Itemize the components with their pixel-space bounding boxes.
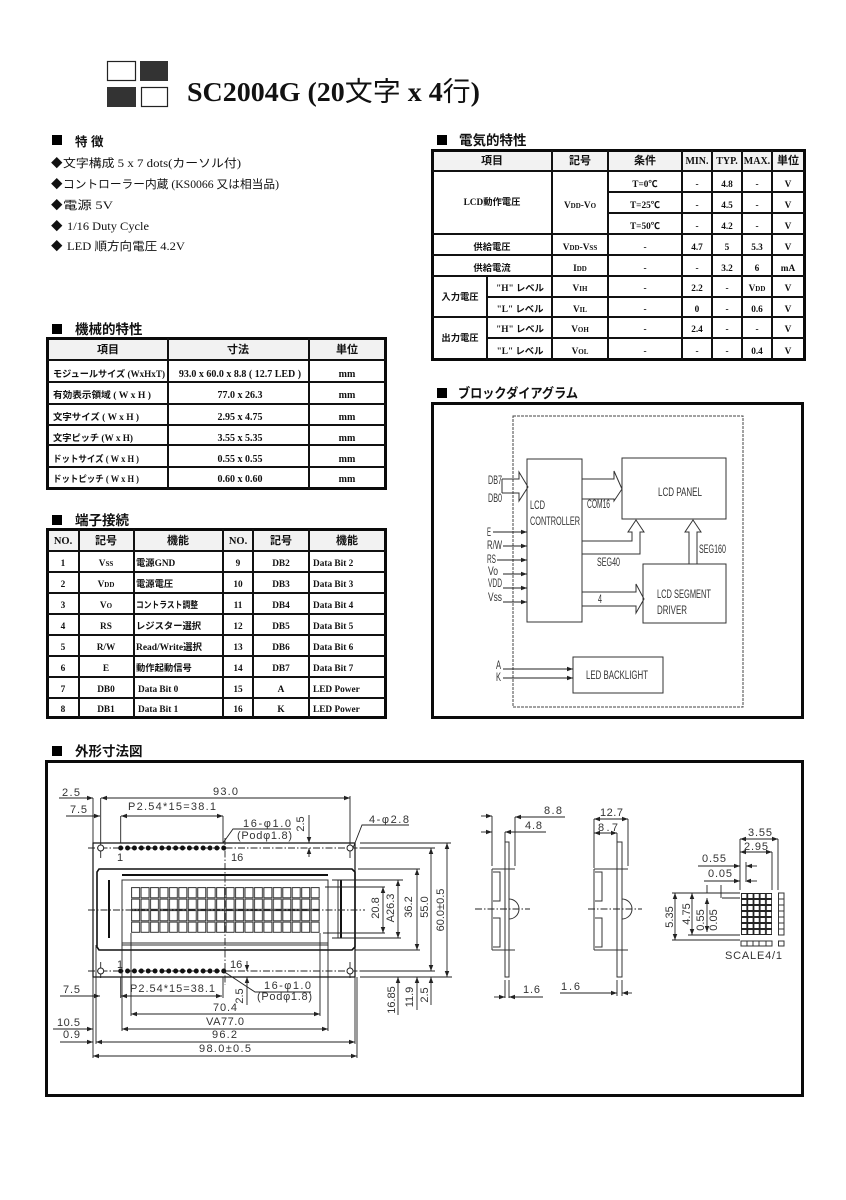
control signal inputs: R/W [487, 540, 502, 552]
dimensions: front view right: 11.9 [404, 987, 416, 1007]
dimensions: front view right: A26.3 [385, 894, 397, 922]
table: pins: 16 [233, 705, 243, 715]
table: electrical: 0.6 [751, 305, 763, 315]
drawing: character detail, scale 4/1: 5.35 [664, 906, 676, 928]
table: pins: 13 [233, 643, 243, 653]
arrow: SEG40 [582, 520, 644, 569]
dimensions: front view bottom: 10.5 [57, 1017, 80, 1029]
table: electrical: - [643, 325, 647, 335]
viewing area frame [122, 874, 328, 876]
logo: four squares [107, 61, 168, 107]
dimensions: front view top: 2.5 [62, 787, 80, 799]
table: electrical: V [785, 180, 792, 190]
arrow: SEG160 [685, 520, 726, 564]
table: electrical: "L" レベル [497, 304, 543, 315]
table: electrical: - [725, 325, 729, 335]
table: pins: 12 [233, 622, 243, 632]
table: electrical: 0.4 [751, 347, 763, 357]
table: electrical: V [785, 201, 792, 211]
table: pins: RS [100, 622, 112, 632]
table: mechanical: 0.55 x 0.55 [218, 454, 262, 465]
control signal inputs: Vss [488, 592, 502, 604]
arrow: SEG160: SEG160 [699, 544, 726, 556]
table: pins: Data Bit 5 [313, 622, 354, 632]
heading: electrical: 電気的特性 [459, 132, 527, 148]
drawing: side view left: 4.8 [525, 820, 542, 832]
table: electrical: - [755, 325, 759, 335]
table: electrical: T=25℃ [630, 200, 661, 211]
feature list: LED 順方向電圧 4.2V [67, 239, 186, 253]
arrow: SEG40: SEG40 [597, 557, 620, 569]
dimensions: front view top: 7.5 [70, 804, 87, 816]
backlight inputs A and K: A [496, 660, 501, 672]
table: pins: 2 [61, 580, 66, 590]
block: LCD panel: LCD PANEL [658, 487, 702, 499]
drawing: character detail, scale 4/1: 3.55 [748, 827, 772, 839]
dimensions: front view bottom: 2.5 [234, 988, 246, 1004]
table: electrical: VDD-VSS [563, 243, 597, 253]
dimensions: front view right: 36.2 [403, 896, 415, 918]
table: mechanical: 文字ピッチ (W x H) [53, 432, 133, 444]
table: electrical: - [695, 180, 699, 190]
table: pins: VDD [98, 580, 114, 590]
table: pins: 3 [61, 601, 66, 611]
drawing: character detail, scale 4/1: 2.95 [744, 841, 768, 853]
table: pins: 1 [61, 559, 66, 569]
table: electrical: "H" レベル [496, 283, 544, 294]
display bezel [97, 869, 355, 950]
dimensions: front view bottom: 0.9 [63, 1029, 80, 1041]
heading: outline dimensions: 外形寸法図 [75, 743, 142, 759]
heading: pins: 端子接続 [75, 512, 129, 528]
table: mechanical: mm [339, 474, 356, 485]
feature list [51, 156, 279, 253]
dimensions: front view bottom: 7.5 [63, 984, 80, 996]
heading: block diagram: ブロックダイアグラム [458, 385, 578, 401]
table: electrical: VOH [571, 325, 589, 335]
table: pins: 6 [61, 664, 66, 674]
table: mechanical: mm [339, 433, 356, 444]
drawing: side view right: 8.7 [598, 822, 618, 834]
table: pins: Data Bit 4 [313, 601, 354, 611]
block: LCD segment driver: DRIVER [657, 605, 687, 617]
table: electrical: 条件 [634, 153, 656, 167]
table: electrical: V [785, 222, 792, 232]
dimensions: front view bottom: P2.54*15=38.1 [130, 983, 215, 995]
table: electrical: mA [781, 264, 796, 274]
table: mechanical: モジュールサイズ (WxHxT) [53, 368, 165, 380]
table: mechanical: 2.95 x 4.75 [218, 412, 262, 423]
center lines [88, 838, 365, 985]
table: mechanical: 単位 [336, 342, 358, 356]
table: electrical: - [755, 180, 759, 190]
drawing: character detail, scale 4/1: 0.55 [695, 909, 707, 931]
dimensions: front view right [323, 843, 452, 1015]
heading: features [52, 134, 104, 149]
arrow: data bus DB7-DB0 [488, 472, 528, 505]
table: mechanical: 項目 [97, 343, 119, 356]
table: pins: A [278, 685, 285, 695]
heading: outline dimensions [52, 743, 142, 759]
table: pins: DB3 [272, 580, 290, 590]
table: electrical: VDD-VO [564, 201, 597, 211]
drawing: character detail, scale 4/1: SCALE4/1 [725, 950, 782, 962]
panel: mechanical characteristics [47, 321, 386, 489]
table: electrical: - [695, 222, 699, 232]
table: pins: VSS [99, 559, 113, 569]
table: pins: VO [100, 601, 113, 611]
table: electrical: 4.2 [721, 222, 733, 232]
table: mechanical: 3.55 x 5.35 [218, 433, 262, 444]
dimensions: front view top: 2.5 [295, 816, 307, 832]
table: electrical: 単位 [777, 153, 799, 167]
table: electrical: V [785, 325, 792, 335]
drawing: front view: 1 [117, 852, 123, 864]
table: mechanical: mm [339, 412, 356, 423]
table: pins: DB6 [272, 643, 290, 653]
block: LCD segment driver [643, 564, 726, 623]
table: pins: 記号 [95, 534, 117, 547]
dimensions: front view bottom: (Podφ1.8) [257, 991, 312, 1003]
dimensions: front view right: 60.0±0.5 [435, 889, 447, 931]
feature list: ◆ [51, 239, 63, 253]
dimensions: front view top [59, 786, 409, 857]
feature list: 電源 5V [63, 198, 114, 212]
table: pins: 電源電圧 [136, 578, 173, 590]
table: electrical: - [755, 201, 759, 211]
drawing: front view: 1 [117, 959, 123, 971]
table: electrical: IDD [573, 264, 587, 274]
table: pins: DB5 [272, 622, 290, 632]
table: electrical: 項目 [481, 154, 503, 167]
arrow: COM16 [582, 471, 622, 511]
table: electrical: V [785, 305, 792, 315]
table: pins: 動作起動信号 [136, 662, 192, 674]
panel: features [51, 134, 279, 253]
table: pins: Data Bit 0 [138, 685, 179, 695]
panel: block diagram [432, 385, 802, 718]
dimensions: front view right: 16.85 [386, 986, 398, 1014]
panel: electrical characteristics [432, 132, 805, 360]
table: electrical: - [643, 305, 647, 315]
table: pins: Read/Write選択 [136, 641, 203, 653]
feature list: ◆ [51, 156, 63, 170]
table: pins: 14 [233, 664, 243, 674]
table: mechanical: ドットサイズ ( W x H ) [53, 453, 139, 465]
table: pins: 11 [234, 601, 243, 611]
dimensions: front view right: 55.0 [419, 896, 431, 918]
dimensions: front view top: 4-φ2.8 [369, 814, 409, 826]
table: electrical [432, 150, 805, 360]
table: pins: Data Bit 2 [313, 559, 354, 569]
arrow: data bus DB7-DB0: DB7 [488, 475, 502, 487]
control signal inputs: Vo [488, 566, 498, 578]
table: pins: 電源GND [136, 557, 176, 569]
control signal inputs: E [487, 527, 491, 539]
table: mechanical: mm [339, 369, 356, 380]
arrow: data bus DB7-DB0: DB0 [488, 493, 502, 505]
table: electrical: 6 [755, 264, 760, 274]
table: pins: DB1 [97, 705, 115, 715]
table: electrical: V [785, 347, 792, 357]
table: mechanical: 有効表示領域 ( W x H ) [53, 389, 151, 401]
table: electrical: MAX. [744, 156, 771, 167]
table: electrical: 4.8 [721, 180, 733, 190]
dimensions: front view top: P2.54*15=38.1 [128, 801, 216, 813]
table: electrical: VIL [573, 305, 587, 315]
table: electrical: 入力電圧 [441, 291, 479, 303]
table: electrical: 4.7 [691, 243, 703, 253]
drawing: character detail, scale 4/1: 0.05 [708, 909, 720, 931]
table: pins: Data Bit 7 [313, 664, 354, 674]
drawing: character detail, scale 4/1 [664, 827, 784, 962]
table: mechanical: 寸法 [227, 342, 249, 356]
module outline [513, 416, 743, 707]
table: pins: Data Bit 1 [138, 705, 179, 715]
dimensions: front view top: (Podφ1.8) [237, 830, 292, 842]
table: pins: Data Bit 6 [313, 643, 354, 653]
table: electrical: - [643, 284, 647, 294]
table: electrical: "L" レベル [497, 346, 543, 357]
table: mechanical: mm [339, 390, 356, 401]
table: electrical: V [785, 284, 792, 294]
table: pins: 機能 [167, 533, 189, 547]
heading: mechanical: 機械的特性 [75, 321, 143, 337]
table: electrical: - [643, 347, 647, 357]
table: electrical: - [725, 305, 729, 315]
heading: pins [52, 512, 129, 528]
drawing: front view: 16 [230, 959, 242, 971]
dimensions: front view bottom: 70.4 [213, 1002, 237, 1014]
table: electrical: 2.4 [691, 325, 703, 335]
table: electrical: 供給電圧 [473, 241, 511, 253]
table: pins: LED Power [313, 705, 360, 715]
arrow: 4-bit bus [582, 584, 644, 613]
table: pins: NO. [229, 536, 248, 547]
table: pins: 10 [233, 580, 243, 590]
table: electrical: - [643, 264, 647, 274]
title: SC2004G (20文字 x 4行) [187, 77, 480, 107]
table: electrical: VDD [749, 284, 765, 294]
drawing: side view right: 1.6 [561, 981, 580, 993]
table: electrical: LCD動作電圧 [464, 196, 520, 208]
table: pins: Data Bit 3 [313, 580, 354, 590]
table: electrical: 供給電流 [473, 262, 511, 274]
dimensions: front view bottom [53, 933, 357, 1058]
drawing: side view left: 8.8 [544, 805, 562, 817]
table: mechanical: 77.0 x 26.3 [218, 390, 262, 401]
control signal inputs: VDD [488, 578, 502, 590]
table: pins: コントラスト調整 [136, 599, 199, 611]
table: electrical: MIN. [685, 156, 709, 167]
drawing: side view right: 12.7 [600, 807, 623, 819]
table: pins: NO. [54, 536, 73, 547]
dimensions: front view top: 93.0 [213, 786, 238, 798]
drawing: front view: 16 [231, 852, 243, 864]
table: electrical: TYP. [716, 156, 738, 167]
drawing: side view left [475, 805, 565, 998]
dimensions: front view right: 20.8 [370, 897, 382, 919]
table: pins: DB0 [97, 685, 115, 695]
drawing: side view left: 1.6 [523, 984, 540, 996]
block: LCD controller [527, 459, 582, 622]
table: mechanical: 文字サイズ ( W x H ) [53, 411, 139, 423]
block: LCD segment driver: LCD SEGMENT [657, 589, 711, 601]
block: LCD controller: LCD [530, 500, 545, 512]
backlight inputs A and K [496, 660, 573, 684]
table: mechanical: 93.0 x 60.0 x 8.8 ( 12.7 LED ) [179, 369, 301, 380]
arrow: 4-bit bus: 4 [598, 594, 602, 606]
control signal inputs: RS [487, 554, 496, 566]
table: pins [47, 529, 386, 718]
table: electrical: - [755, 222, 759, 232]
table: pins: E [103, 664, 109, 674]
table: electrical: 3.2 [721, 264, 733, 274]
table: electrical: - [725, 347, 729, 357]
table: electrical: T=50℃ [630, 221, 661, 232]
control signal inputs [487, 527, 527, 604]
table: electrical: 5 [725, 243, 730, 253]
dimensions: front view bottom: VA77.0 [206, 1016, 244, 1028]
bottom pin pads [121, 968, 224, 974]
arrow: COM16: COM16 [587, 499, 610, 511]
drawing: character detail, scale 4/1: 4.75 [681, 903, 693, 925]
feature list: 文字構成 5 x 7 dots(カーソル付) [63, 156, 241, 170]
table: pins: 7 [61, 685, 66, 695]
table: pins: DB2 [272, 559, 290, 569]
table: pins: LED Power [313, 685, 360, 695]
dimensions: front view top: 16-φ1.0 [243, 818, 291, 830]
table: pins: 記号 [270, 534, 292, 547]
backlight inputs A and K: K [496, 672, 501, 684]
table: mechanical: ドットピッチ ( W x H ) [53, 474, 139, 485]
feature list: 1/16 Duty Cycle [67, 221, 149, 233]
table: electrical: VIH [573, 284, 588, 294]
heading: mechanical [52, 321, 143, 337]
table: electrical: 記号 [569, 154, 591, 167]
table: electrical: - [695, 347, 699, 357]
table: pins: 機能 [336, 533, 358, 547]
drawing: character detail, scale 4/1: 0.55 [702, 853, 726, 865]
drawing: side view right [560, 807, 642, 996]
feature list: コントローラー内蔵 (KS0066 又は相当品) [63, 177, 279, 191]
table: pins: レジスター選択 [136, 620, 202, 632]
block: LCD controller: CONTROLLER [530, 516, 580, 528]
table: mechanical [47, 338, 386, 489]
block: LED backlight: LED BACKLIGHT [586, 670, 648, 682]
table: electrical: V [785, 243, 792, 253]
LCD character grid [131, 887, 320, 933]
table: electrical: 2.2 [691, 284, 703, 294]
table: electrical: 5.3 [751, 243, 763, 253]
dimensions: front view bottom: 96.2 [212, 1029, 237, 1041]
table: electrical: VOL [572, 347, 589, 357]
table: electrical: - [643, 243, 647, 253]
table: pins: 5 [61, 643, 66, 653]
heading: features: 特 徴 [75, 134, 104, 149]
table: pins: R/W [97, 643, 116, 653]
diagram frame [432, 404, 802, 718]
feature list: ◆ [51, 177, 63, 191]
block: LED backlight [573, 657, 663, 693]
dimensions: front view right: 2.5 [419, 987, 431, 1003]
board outline [93, 843, 355, 977]
table: pins: DB7 [272, 664, 290, 674]
dimensions: front view bottom: 98.0±0.5 [199, 1043, 251, 1055]
table: pins: DB4 [272, 601, 290, 611]
panel: pin connections [47, 512, 386, 718]
dimensions: front view bottom: 16-φ1.0 [264, 980, 311, 992]
drawing: character detail, scale 4/1: 0.05 [708, 868, 732, 880]
top pin pads [121, 846, 224, 850]
table: pins: K [277, 705, 285, 715]
table: electrical: - [695, 201, 699, 211]
feature list: ◆ [51, 219, 63, 233]
table: electrical: - [725, 284, 729, 294]
table: mechanical: 0.60 x 0.60 [218, 474, 262, 485]
panel: outline dimensions [46, 743, 802, 1096]
table: pins: 8 [61, 705, 66, 715]
table: electrical: 0 [695, 305, 700, 315]
table: pins: 4 [61, 622, 66, 632]
drawing frame [46, 762, 802, 1096]
table: electrical: T=0℃ [632, 179, 658, 190]
table: pins: 15 [233, 685, 243, 695]
drawing: front view [88, 796, 365, 985]
table: pins: 9 [236, 559, 241, 569]
table: electrical: 4.5 [721, 201, 733, 211]
table: electrical: "H" レベル [496, 324, 544, 335]
feature list: ◆ [51, 198, 63, 212]
block: LCD panel [622, 458, 726, 519]
table: electrical: - [695, 264, 699, 274]
table: mechanical: mm [339, 454, 356, 465]
table: electrical: 出力電圧 [441, 332, 479, 344]
mounting holes [98, 845, 353, 974]
